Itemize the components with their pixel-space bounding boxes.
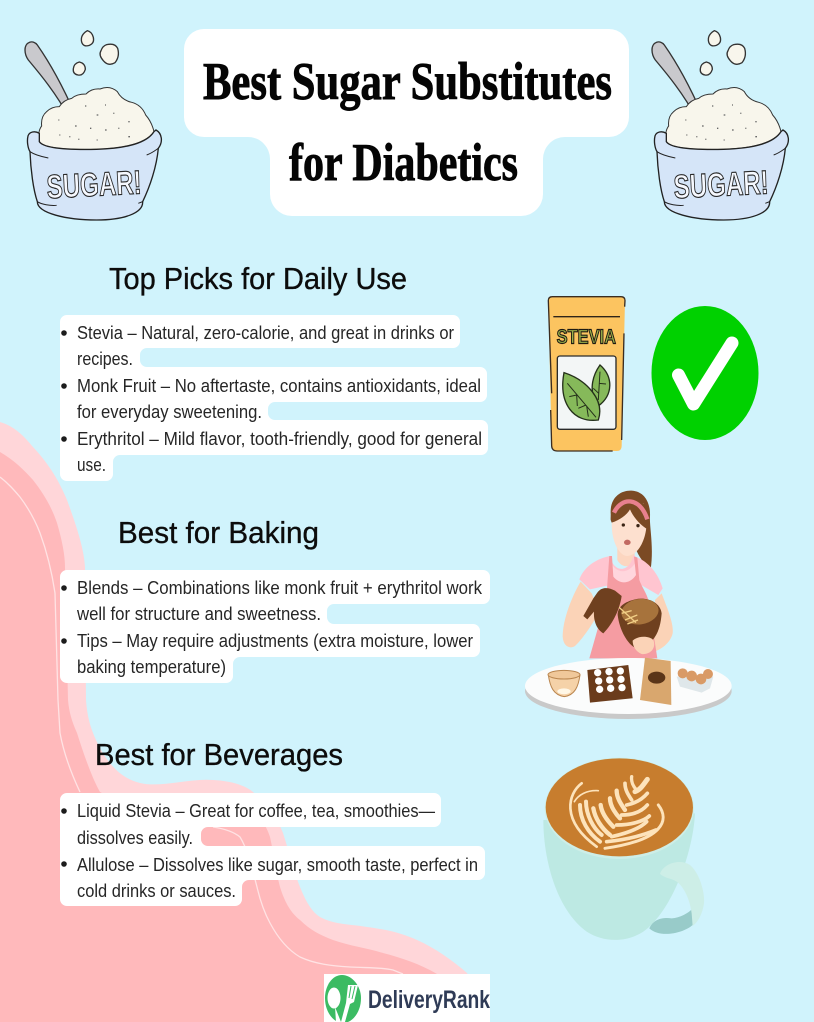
panel: baking list: baking temperature) <box>77 657 226 677</box>
icon: sugar bowl right <box>652 31 788 220</box>
icon: sugar bowl left <box>25 31 161 220</box>
panel: top picks list: Stevia – Natural, zero-calorie, and great in drinks or <box>77 323 454 343</box>
heading: baking: Best for Baking <box>118 515 319 550</box>
panel: beverages list: dissolves easily. <box>77 828 193 848</box>
panel: baking list: Tips – May require adjustments (extra moisture, lower <box>77 631 473 651</box>
icon: sugar bowl right: SUGAR! <box>673 164 769 206</box>
panel: beverages list: Liquid Stevia – Great for coffee, tea, smoothies— <box>77 801 435 821</box>
logo: DeliveryRank: DeliveryRank <box>368 986 490 1014</box>
illustration: woman baking at table <box>525 491 732 719</box>
panel: top picks list: for everyday sweetening. <box>77 402 262 422</box>
icon: stevia packet: STEVIA <box>557 325 616 348</box>
heading: top picks: Top Picks for Daily Use <box>109 261 407 296</box>
panel: beverages list: Allulose – Dissolves like sugar, smooth taste, perfect in <box>77 855 478 875</box>
title background <box>184 29 629 216</box>
title: Best Sugar Substitutes <box>203 53 612 111</box>
title: for Diabetics <box>289 134 518 192</box>
illustration: latte cup <box>543 758 704 940</box>
logo icon <box>325 975 361 1022</box>
title <box>184 29 629 216</box>
panel: top picks list <box>60 315 488 481</box>
icon: sugar bowl left: SUGAR! <box>46 164 142 206</box>
panel: top picks list: recipes. <box>77 349 133 369</box>
heading: beverages: Best for Beverages <box>95 737 343 772</box>
panel: beverages list: cold drinks or sauces. <box>77 881 236 901</box>
icon: green check mark <box>652 306 758 440</box>
logo: DeliveryRank <box>324 974 490 1022</box>
icon: stevia packet <box>548 297 625 451</box>
panel: top picks list: use. <box>77 455 106 475</box>
background: pink waves <box>0 422 488 1022</box>
panel: top picks list: Erythritol – Mild flavor, tooth-friendly, good for general <box>77 429 482 449</box>
panel: baking list: Blends – Combinations like monk fruit + erythritol work <box>77 578 483 598</box>
panel: baking list: well for structure and sweetness. <box>76 604 321 624</box>
panel: beverages list <box>60 793 485 906</box>
panel: top picks list: Monk Fruit – No aftertaste, contains antioxidants, ideal <box>77 376 481 396</box>
panel: baking list <box>60 570 490 683</box>
